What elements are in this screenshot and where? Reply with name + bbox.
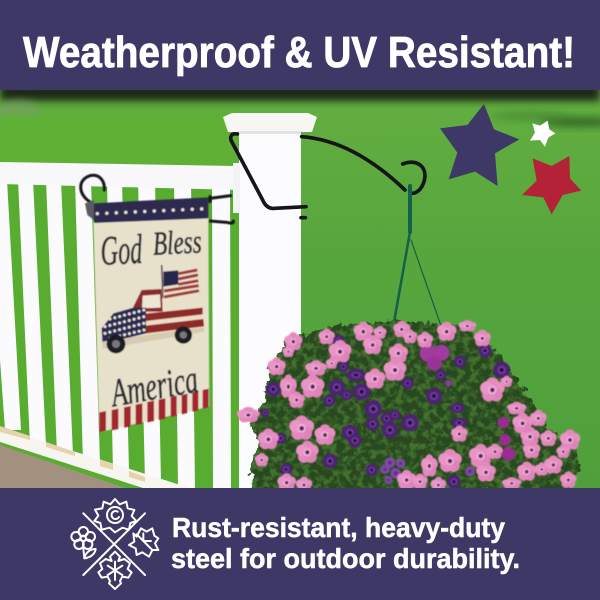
paving under the fence: [0, 445, 125, 488]
rear wheel: [175, 326, 192, 344]
navy star: [440, 104, 519, 186]
burlap flag body: [93, 217, 209, 432]
navy star band: [94, 197, 208, 223]
decorative stars: [440, 104, 581, 214]
hanging flower basket: [237, 320, 580, 493]
front wheel: [107, 335, 125, 353]
white star: [530, 121, 555, 147]
pink petunias: [237, 320, 580, 493]
lavender and magenta blooms: [380, 345, 515, 484]
fence: balusters: [0, 180, 231, 488]
fence: top and bottom rails: [0, 162, 240, 488]
photo background: blurred lawn: [0, 84, 600, 490]
red stripes along the hem: [99, 389, 209, 432]
flag clip: [85, 200, 94, 220]
maple leaf: [129, 528, 158, 557]
flag hanger hooks: [81, 175, 233, 223]
text: God Bless: God: [99, 227, 144, 275]
caption: Rust-resistant, heavy-duty: [172, 512, 505, 543]
flower: [71, 527, 96, 558]
four seasons icon: [71, 499, 158, 589]
truck: [102, 289, 204, 353]
bottom banner: [0, 488, 600, 600]
caption: steel for outdoor durability.: [171, 543, 520, 574]
top banner: [0, 0, 600, 90]
star hood: [102, 308, 146, 348]
running board: [102, 327, 204, 349]
row of stars: [97, 209, 206, 214]
black hanging bracket: [231, 134, 425, 218]
truck bed stripes: [146, 306, 204, 337]
sun: [94, 499, 136, 532]
snowflake: [98, 552, 132, 589]
truck cab: [133, 289, 163, 312]
text: God Bless: Bless: [152, 223, 203, 263]
foliage mass: [250, 320, 580, 492]
text: America: America: [106, 357, 201, 416]
green hanging strap: [387, 186, 447, 362]
garden flag: God Bless America: [81, 175, 233, 432]
red star: [522, 156, 581, 214]
caption: [171, 512, 520, 574]
text: God Bless: [99, 223, 203, 275]
small American flag on truck: [162, 265, 199, 302]
white fence post with cap: [223, 113, 317, 488]
dark purple petunias: [261, 335, 510, 488]
